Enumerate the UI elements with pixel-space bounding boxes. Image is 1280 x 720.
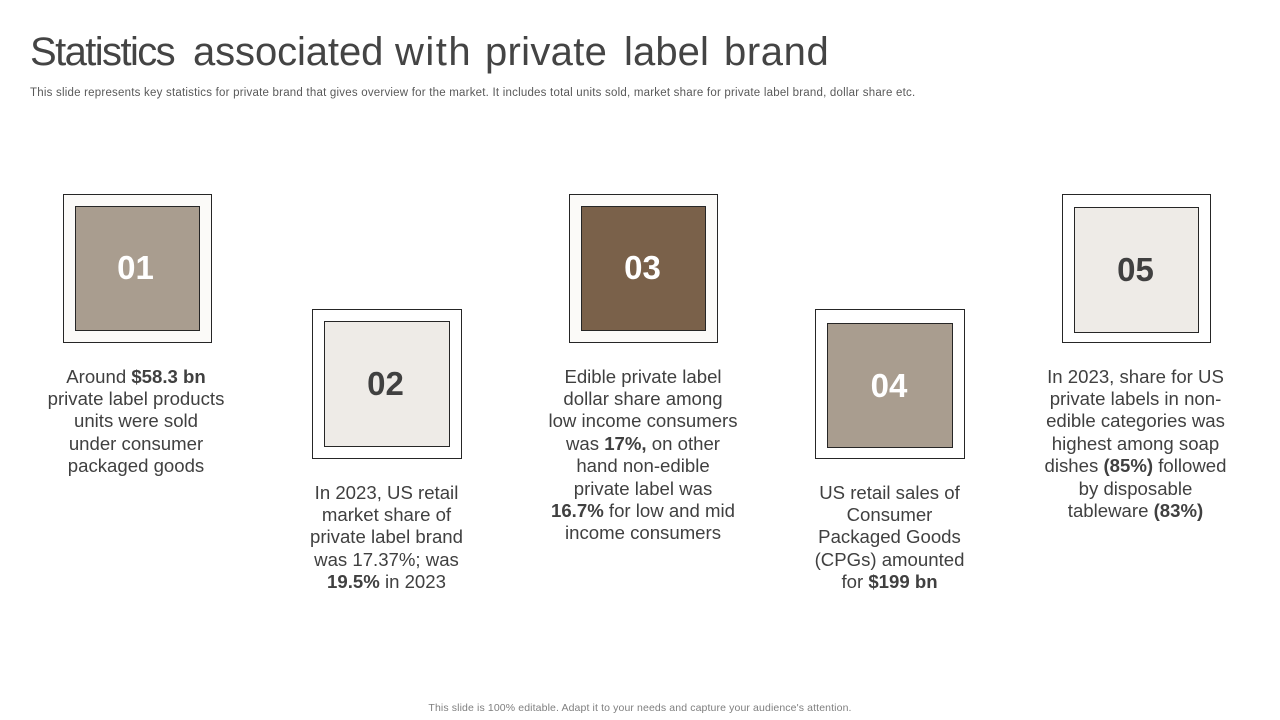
- title: with: [395, 30, 472, 74]
- text 02: [310, 482, 463, 592]
- text 03: 16.7% for low and mid: [551, 500, 735, 521]
- text 03: low income consumers: [548, 410, 738, 431]
- text 03: income consumers: [565, 522, 721, 543]
- panel: statistic 04: [815, 309, 965, 592]
- number 01: 01: [117, 249, 154, 286]
- number box 02: [312, 309, 462, 459]
- number 05: 05: [1117, 250, 1154, 288]
- text 02: was 17.37%; was: [314, 549, 459, 570]
- text 03: Edible private label: [564, 366, 722, 386]
- number 02: 02: [367, 364, 404, 402]
- number box 04: [815, 309, 965, 459]
- subtitle: This slide represents key statistics for private brand that gives overview for the market. It includes total units sold, market share for private label brand, dollar share etc.: [30, 87, 915, 99]
- number box 03: [569, 194, 718, 343]
- text 04: for $199 bn: [841, 571, 938, 592]
- text 05: tableware (83%): [1068, 500, 1203, 521]
- text 04: (CPGs) amounted: [815, 549, 964, 570]
- text 05: dishes (85%) followed: [1045, 455, 1226, 476]
- number 02: [324, 321, 450, 447]
- text 04: Packaged Goods: [818, 526, 961, 547]
- title: label: [624, 30, 709, 74]
- panel: statistic 01: [48, 194, 224, 476]
- text 05: highest among soap: [1052, 433, 1219, 454]
- number 01: [75, 206, 200, 331]
- text 03: private label was: [574, 478, 712, 499]
- text 05: In 2023, share for US: [1047, 366, 1224, 386]
- text 04: US retail sales of: [819, 482, 960, 502]
- text 01: packaged goods: [68, 455, 204, 476]
- text 03: dollar share among: [563, 388, 723, 409]
- text 03: hand non-edible: [576, 455, 710, 476]
- text 01: under consumer: [69, 433, 203, 454]
- text 01: private label products: [48, 388, 224, 409]
- text 04: Consumer: [847, 504, 932, 525]
- footer note: This slide is 100% editable. Adapt it to your needs and capture your audience's attention.: [428, 702, 852, 714]
- text 03: [548, 366, 738, 543]
- text 01: Around $58.3 bn: [66, 366, 206, 386]
- number 05: [1074, 207, 1199, 333]
- title: associated: [193, 30, 383, 74]
- text 02: market share of: [322, 504, 451, 525]
- title: [30, 30, 829, 74]
- number 03: 03: [624, 249, 661, 286]
- number box 01: [63, 194, 212, 343]
- title: brand: [724, 30, 829, 74]
- number 04: [827, 323, 953, 448]
- panel: statistic 05: [1045, 194, 1226, 521]
- text 02: private label brand: [310, 526, 463, 547]
- panel: statistic 03: [548, 194, 738, 543]
- text 03: was 17%, on other: [566, 433, 720, 454]
- panel: statistic 02: [310, 309, 463, 592]
- text 05: edible categories was: [1046, 410, 1225, 431]
- title: Statistics: [30, 30, 174, 74]
- number 04: 04: [871, 367, 907, 404]
- text 04: [815, 482, 964, 592]
- text 05: private labels in non-: [1050, 388, 1221, 409]
- text 01: [48, 366, 224, 476]
- number 03: [581, 206, 706, 331]
- text 02: In 2023, US retail: [315, 482, 458, 502]
- text 01: units were sold: [74, 410, 198, 431]
- title: private: [485, 30, 607, 74]
- text 05: [1045, 366, 1226, 521]
- number box 05: [1062, 194, 1211, 343]
- text 05: by disposable: [1079, 478, 1192, 499]
- text 02: 19.5% in 2023: [327, 571, 446, 592]
